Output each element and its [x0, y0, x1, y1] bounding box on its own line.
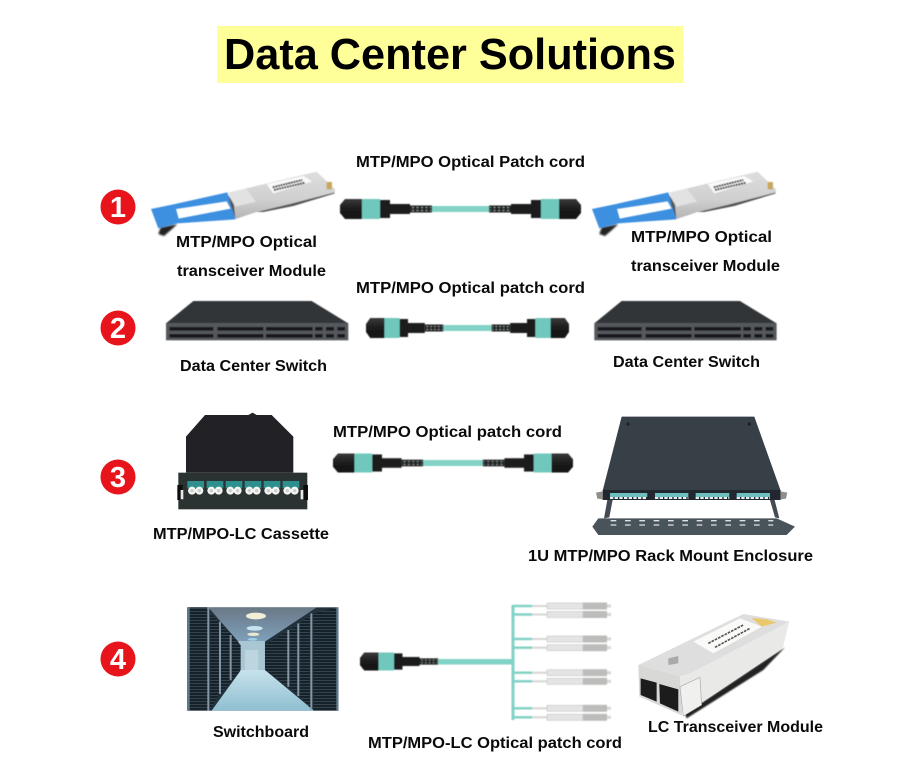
- label: rack mount enclosure: 1U MTP/MPO Rack Mount Enclosure: [528, 548, 813, 565]
- icon: LC cassette: [177, 413, 308, 509]
- icon: MPO patch cord: [333, 454, 573, 472]
- panel: row 1 transceivers and patch cord: [100, 154, 780, 280]
- icon: right data center switch: [594, 301, 777, 340]
- icon: number 2 badge: [100, 310, 136, 346]
- label: right transceiver module: MTP/MPO Optical: [631, 229, 772, 246]
- label: right transceiver module: [631, 229, 780, 275]
- icon: number 4 badge: [100, 642, 136, 676]
- icon: MPO patch cord: [340, 199, 581, 219]
- icon: number 2 badge: 2: [110, 313, 126, 345]
- icon: number 1 badge: [100, 190, 136, 224]
- label: LC transceiver module: LC Transceiver Module: [648, 719, 823, 736]
- icon: left QSFP transceiver: [151, 172, 335, 236]
- label: left transceiver module: MTP/MPO Optical: [176, 234, 317, 251]
- icon: LC SFP transceiver: [638, 614, 789, 718]
- label: left transceiver module: [176, 234, 326, 280]
- icon: number 4 badge: 4: [110, 644, 126, 676]
- icon: number 3 badge: 3: [110, 462, 126, 494]
- label: right transceiver module: transceiver Module: [631, 258, 780, 275]
- label: patch cord heading: MTP/MPO Optical patch cord: [333, 424, 562, 441]
- label: LC cassette: MTP/MPO-LC Cassette: [153, 526, 329, 543]
- label: left switch: Data Center Switch: [180, 358, 327, 375]
- label: left transceiver module: transceiver Module: [177, 263, 326, 280]
- panel: row 2 switches and patch cord: [100, 280, 777, 375]
- icon: rack mount enclosure: [592, 417, 795, 535]
- icon: number 1 badge: 1: [110, 192, 126, 224]
- icon: left data center switch: [166, 301, 348, 340]
- icon: number 3 badge: [100, 460, 136, 494]
- label: switchboard: Switchboard: [213, 724, 309, 741]
- label: patch cord heading: MTP/MPO Optical Patch cord: [356, 154, 585, 171]
- title: Data Center Solutions: [224, 30, 676, 79]
- label: right switch: Data Center Switch: [613, 354, 760, 371]
- label: breakout cord: MTP/MPO-LC Optical patch cord: [368, 735, 622, 752]
- icon: MPO patch cord: [366, 318, 569, 338]
- label: patch cord heading: MTP/MPO Optical patch cord: [356, 280, 585, 297]
- panel: row 4 switchboard and breakout: [100, 602, 823, 752]
- icon: MPO to LC breakout cord: [360, 602, 611, 721]
- image: server room corridor: [187, 607, 338, 711]
- panel: row 3 cassette and enclosure: [100, 413, 813, 565]
- icon: right QSFP transceiver: [592, 172, 776, 236]
